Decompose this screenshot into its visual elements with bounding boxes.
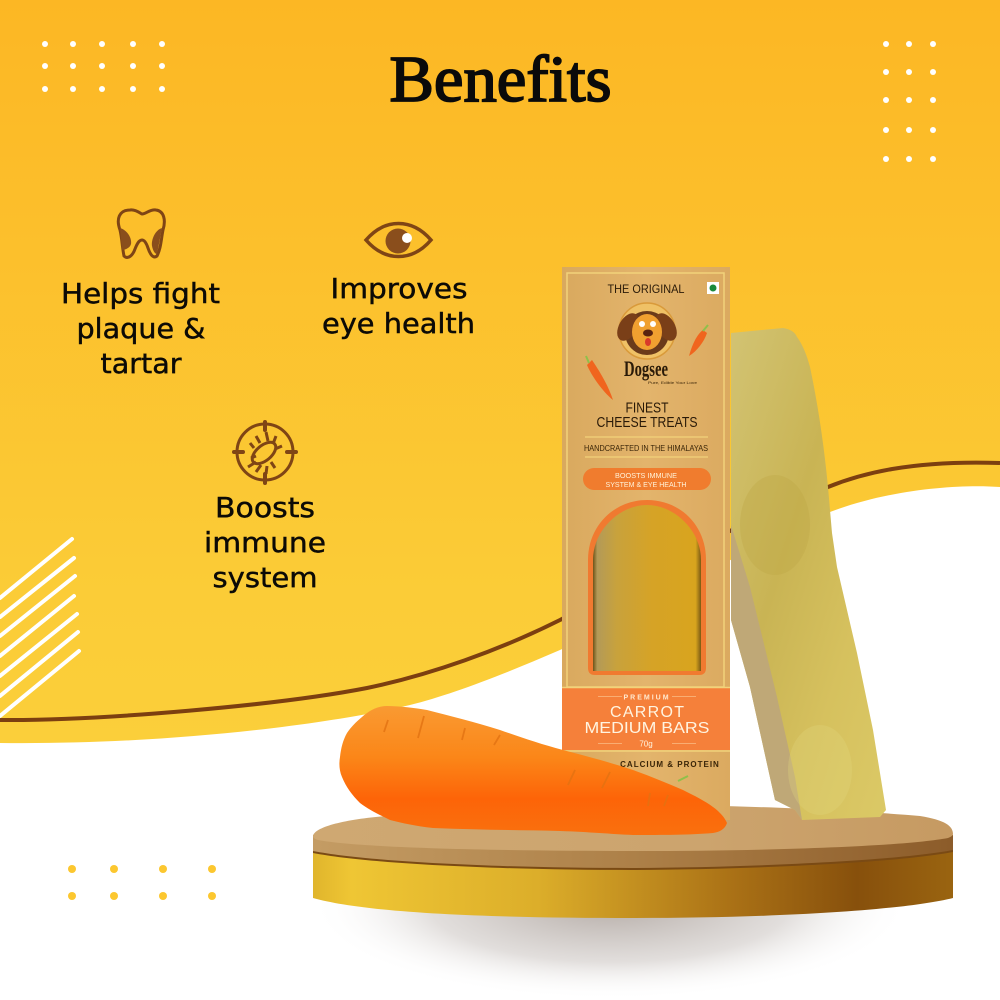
text: improves eye health: Improves [330, 272, 468, 305]
text: boosts immune system: Boosts [215, 491, 315, 524]
carrot sprig left [586, 356, 613, 400]
brand name: Dogsee [624, 356, 668, 381]
veg mark [707, 282, 719, 294]
flourishes [585, 437, 708, 457]
box footer text: CALCIUM & PROTEIN [620, 760, 720, 769]
orange band: MEDIUM BARS [584, 720, 710, 737]
dots: top left [42, 41, 165, 92]
dots: bottom left [68, 865, 216, 900]
platform [313, 805, 953, 918]
window [588, 500, 706, 675]
carrot [339, 706, 727, 835]
icon: eye [366, 224, 431, 256]
text: helps fight plaque and tartar [61, 277, 220, 380]
box heading [596, 400, 698, 431]
orange pill [583, 468, 711, 490]
brand tagline: Pure, Edible Your Love [648, 380, 698, 385]
text: helps fight plaque and tartar: Helps fight [61, 277, 220, 310]
platform shadow [310, 810, 910, 1000]
icon: tooth [118, 210, 164, 257]
box heading: CHEESE TREATS [596, 414, 698, 431]
white diagonal stripes [0, 539, 79, 716]
orange pill: SYSTEM & EYE HEALTH [606, 482, 686, 489]
text: improves eye health [322, 272, 475, 340]
text: improves eye health: eye health [322, 307, 475, 340]
box heading: FINEST [626, 400, 668, 416]
cheese bar [731, 328, 886, 820]
orange band: CARROT [610, 704, 684, 721]
text: boosts immune system [204, 491, 326, 594]
green sprig [678, 776, 688, 781]
icon: germ target [234, 422, 296, 483]
orange band: PREMIUM [623, 694, 671, 702]
title: Benefits [390, 43, 612, 116]
curved brown line [0, 463, 1000, 720]
handcrafted: HANDCRAFTED IN THE HIMALAYAS [584, 443, 708, 453]
text: boosts immune system: system [212, 561, 318, 594]
orange band: 70g [639, 740, 653, 748]
carrot sprig right [689, 325, 708, 356]
text: helps fight plaque and tartar: tartar [100, 347, 182, 380]
box text: the original: THE ORIGINAL [608, 282, 685, 296]
orange pill: BOOSTS IMMUNE [615, 473, 677, 480]
dots: top right [883, 41, 936, 162]
orange band [562, 687, 730, 751]
dog logo [613, 303, 681, 359]
text: helps fight plaque and tartar: plaque & [76, 312, 206, 345]
text: boosts immune system: immune [204, 526, 326, 559]
product box [562, 267, 730, 820]
